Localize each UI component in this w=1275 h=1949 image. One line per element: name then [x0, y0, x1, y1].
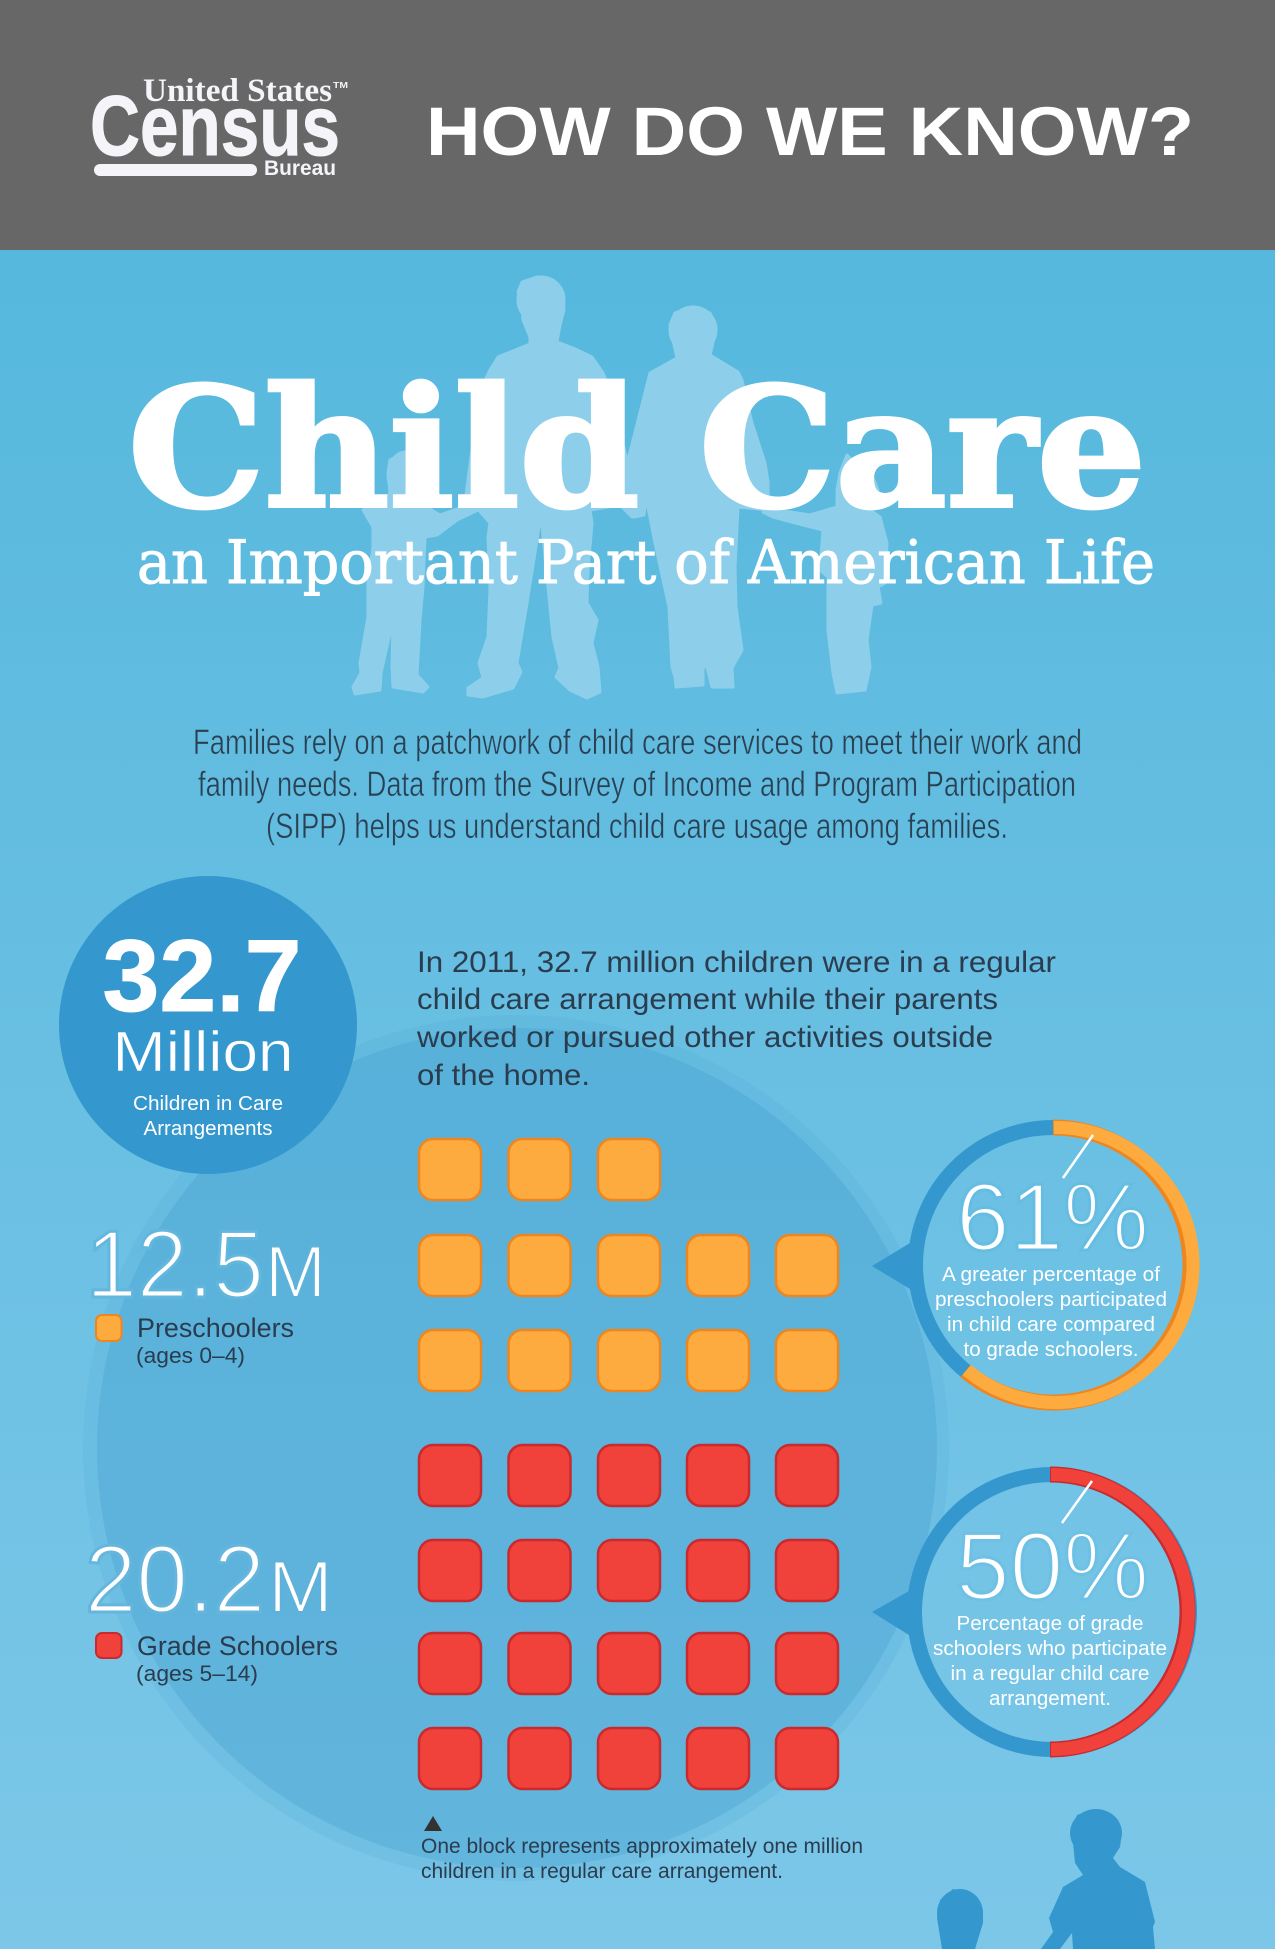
preschoolers label: Preschoolers — [137, 1313, 294, 1343]
intro text — [193, 723, 1082, 846]
footnote — [421, 1816, 863, 1883]
ring: 50 percent: arrangement. — [989, 1688, 1111, 1710]
summary paragraph: worked or pursued other activities outside — [416, 1021, 993, 1054]
summary paragraph — [416, 946, 1056, 1092]
ring: 50 percent — [872, 1474, 1190, 1750]
ring: 50 percent: schoolers who participate — [933, 1638, 1167, 1660]
preschoolers label — [86, 1211, 326, 1368]
ring: 61 percent: A greater percentage of — [942, 1264, 1160, 1286]
footnote: One block represents approximately one million — [421, 1835, 863, 1858]
ring: 50 percent: 50% — [956, 1513, 1149, 1620]
silhouette: left child — [353, 452, 478, 694]
ring: 61 percent: preschoolers participated — [935, 1289, 1167, 1311]
census bureau logo: United States — [143, 73, 332, 109]
census bureau logo: Census — [90, 79, 340, 174]
grade schoolers label: M — [268, 1547, 333, 1628]
header band — [0, 0, 1275, 250]
silhouette: right child — [763, 455, 887, 693]
ring: 61 percent: 61% — [956, 1164, 1149, 1271]
stat circle: 32.7 million: Million — [112, 1020, 294, 1084]
silhouette: bottom child — [937, 1889, 983, 1949]
ring: 50 percent: in a regular child care — [950, 1663, 1150, 1685]
main title: Child Care — [128, 351, 1146, 545]
bottom silhouettes — [937, 1809, 1155, 1949]
summary paragraph: child care arrangement while their parents — [417, 983, 998, 1016]
silhouette: right adult — [628, 307, 768, 687]
subtitle: an Important Part of American Life — [137, 528, 1155, 598]
stat circle: 32.7 million — [59, 876, 357, 1174]
large background circle — [83, 1015, 949, 1881]
footnote: children in a regular care arrangement. — [421, 1860, 783, 1883]
preschoolers label: (ages 0–4) — [136, 1343, 245, 1368]
silhouette: left adult — [465, 277, 640, 698]
header title: HOW DO WE KNOW? — [426, 93, 1194, 170]
census bureau logo: TM — [333, 81, 348, 90]
grade schoolers label: (ages 5–14) — [136, 1661, 258, 1686]
preschoolers label: M — [265, 1232, 326, 1313]
ring: 61 percent: in child care compared — [947, 1314, 1155, 1336]
red grade schooler blocks — [419, 1445, 838, 1789]
stat circle: 32.7 million: 32.7 — [102, 919, 302, 1033]
orange preschooler blocks — [419, 1139, 838, 1391]
silhouette: bottom adult — [1041, 1809, 1155, 1949]
grade schoolers label — [85, 1526, 338, 1686]
intro text: (SIPP) helps us understand child care usage among families. — [266, 807, 1008, 846]
ring: 61 percent: to grade schoolers. — [964, 1339, 1138, 1361]
ring: 61 percent — [872, 1127, 1193, 1402]
stat circle: 32.7 million: Arrangements — [144, 1118, 272, 1140]
summary paragraph: of the home. — [417, 1059, 590, 1092]
family silhouette — [353, 277, 887, 698]
summary paragraph: In 2011, 32.7 million children were in a regular — [417, 946, 1056, 979]
stat circle: 32.7 million: Children in Care — [133, 1093, 283, 1115]
census bureau logo: Bureau — [264, 157, 336, 180]
grade schoolers label: 20.2 — [85, 1526, 265, 1633]
grade schoolers label: Grade Schoolers — [137, 1631, 338, 1661]
ring: 50 percent: Percentage of grade — [956, 1613, 1144, 1635]
preschoolers label: 12.5 — [86, 1211, 264, 1318]
